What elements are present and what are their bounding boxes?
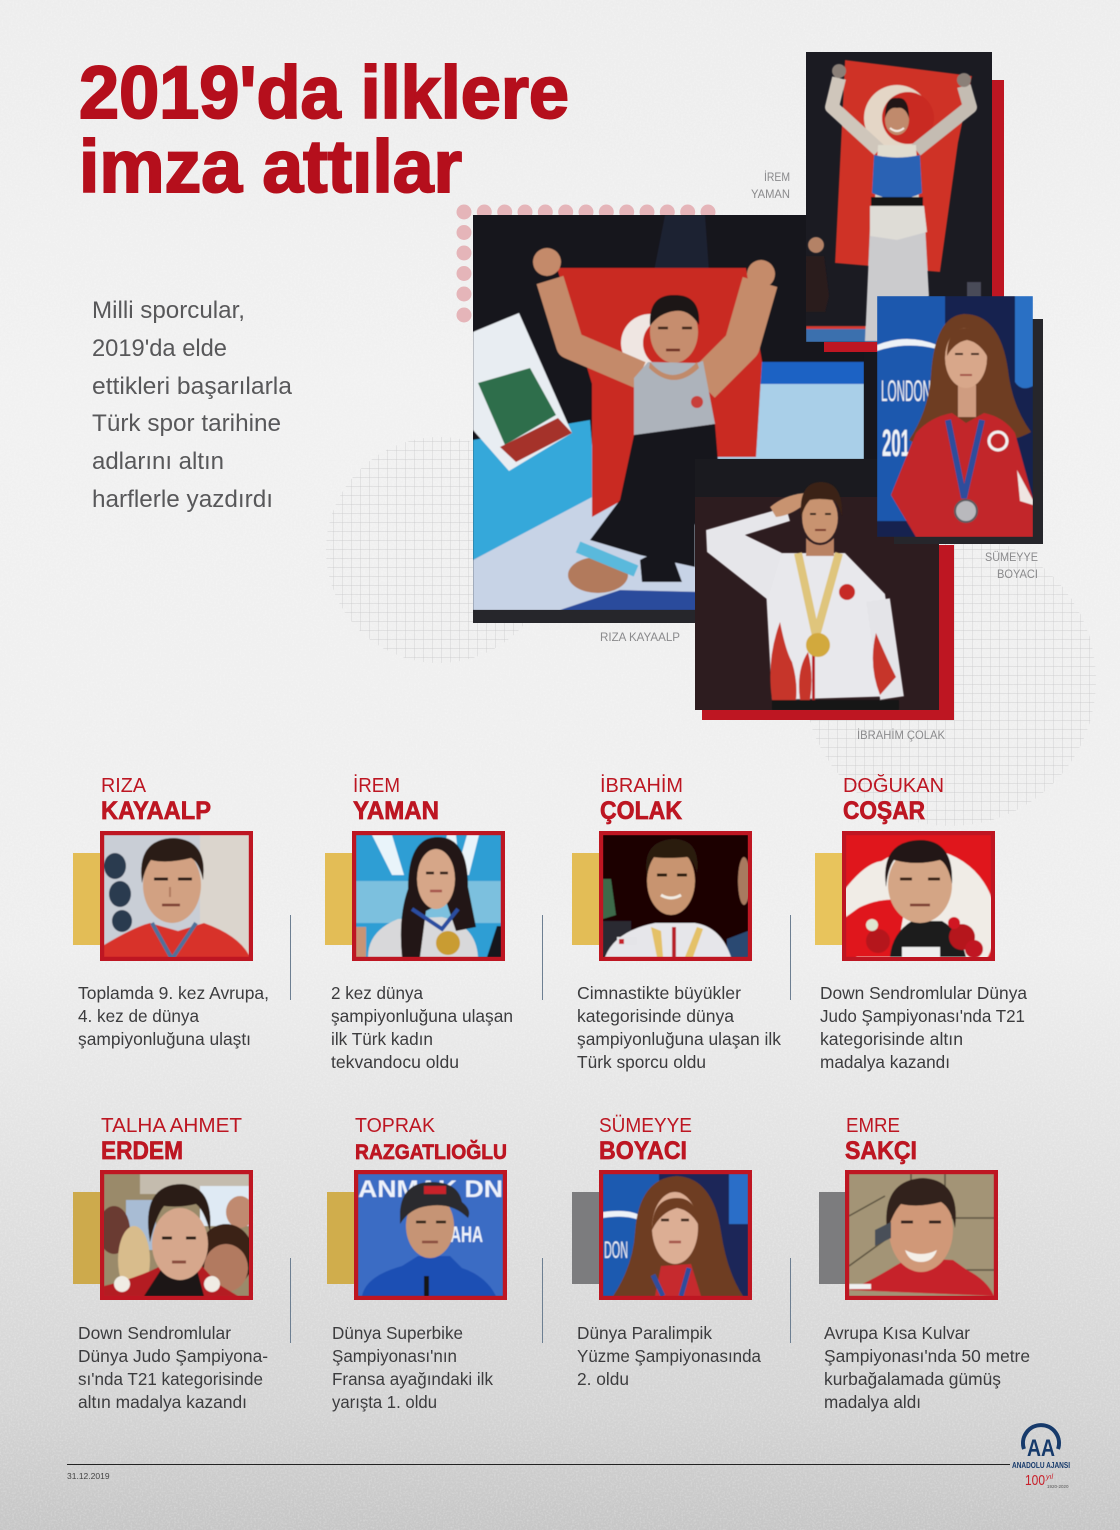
photo captions <box>600 170 1038 742</box>
description: Emre Sakçı <box>824 1323 1030 1412</box>
description: Talha Ahmet Erdem: Dünya Judo Şampiyona- <box>78 1346 268 1366</box>
photo captions: SÜMEYYE <box>985 550 1038 564</box>
description: İrem Yaman: ilk Türk kadın <box>331 1029 433 1049</box>
description: Doğukan Coşar: Down Sendromlular Dünya <box>820 983 1027 1003</box>
intro text: harflerle yazdırdı <box>92 486 273 513</box>
portrait: Talha Ahmet Erdem <box>98 1170 254 1300</box>
description: İrem Yaman: tekvandocu oldu <box>331 1052 459 1072</box>
description: İrem Yaman: 2 kez dünya <box>331 983 423 1003</box>
description: Toprak Razgatlıoğlu: Dünya Superbike <box>332 1323 463 1343</box>
intro text <box>92 297 293 513</box>
card: Talha Ahmet Erdem <box>73 1115 268 1412</box>
card: Sümeyye Boyacı: BOYACI <box>599 1137 687 1165</box>
card: İbrahim Çolak: İBRAHİM <box>600 774 683 797</box>
description: İrem Yaman: şampiyonluğuna ulaşan <box>331 1006 513 1026</box>
photo captions: BOYACI <box>997 567 1038 581</box>
portrait: Rıza Kayaalp <box>100 831 253 961</box>
logo: Anadolu Ajansı <box>1012 1425 1070 1489</box>
dot pattern <box>456 204 716 322</box>
description: Talha Ahmet Erdem <box>78 1323 268 1412</box>
logo: Anadolu Ajansı: 1920-2020 <box>1047 1484 1069 1489</box>
card: İrem Yaman <box>325 774 513 1072</box>
logo: Anadolu Ajansı: 100 <box>1025 1472 1045 1489</box>
card: Sümeyye Boyacı: SÜMEYYE <box>599 1115 692 1137</box>
photo: Rıza Kayaalp <box>473 215 878 623</box>
card: İrem Yaman: İREM <box>353 774 400 797</box>
photo: İrem Yaman <box>802 52 1004 352</box>
card: Rıza Kayaalp <box>73 775 269 1049</box>
portrait: İbrahim Çolak <box>599 831 752 961</box>
intro text: adlarını altın <box>92 448 224 475</box>
photo: Sümeyye Boyacı: LONDON <box>881 375 931 408</box>
photo captions: RIZA KAYAALP <box>600 630 680 644</box>
description: Talha Ahmet Erdem: altın madalya kazandı <box>78 1392 247 1412</box>
card: Talha Ahmet Erdem: TALHA AHMET <box>101 1115 242 1137</box>
description: Doğukan Coşar: Judo Şampiyonası'nda T21 <box>820 1006 1025 1026</box>
description: İbrahim Çolak: kategorisinde dünya <box>577 1006 734 1026</box>
date: 31.12.2019 <box>67 1471 110 1481</box>
description: Doğukan Coşar: madalya kazandı <box>820 1052 950 1072</box>
description: İbrahim Çolak <box>577 983 781 1072</box>
grid circle left <box>326 437 552 663</box>
description: Talha Ahmet Erdem: Down Sendromlular <box>78 1323 231 1343</box>
description: İrem Yaman <box>331 983 513 1072</box>
photo captions: İBRAHİM ÇOLAK <box>857 728 945 742</box>
card: Talha Ahmet Erdem: ERDEM <box>101 1137 183 1165</box>
intro text: Milli sporcular, <box>92 297 245 324</box>
logo: Anadolu Ajansı: yıl <box>1045 1474 1053 1481</box>
description: Rıza Kayaalp <box>78 983 269 1049</box>
description: Sümeyye Boyacı <box>577 1323 761 1389</box>
title: 2019'da ilklere <box>79 51 569 134</box>
title: imza attılar <box>79 125 462 208</box>
description: Toprak Razgatlıoğlu: Fransa ayağındaki ilk <box>332 1369 493 1389</box>
card: Rıza Kayaalp: KAYAALP <box>101 797 211 825</box>
description: Rıza Kayaalp: şampiyonluğuna ulaştı <box>78 1029 251 1049</box>
description: Sümeyye Boyacı: Dünya Paralimpik <box>577 1323 712 1343</box>
card: Emre Sakçı: EMRE <box>846 1115 900 1137</box>
description: İbrahim Çolak: Türk sporcu oldu <box>577 1052 706 1072</box>
photo: Sümeyye Boyacı <box>877 296 1043 544</box>
portrait: Doğukan Coşar <box>842 831 995 961</box>
photo: Sümeyye Boyacı: 201 <box>882 423 910 465</box>
description: Doğukan Coşar <box>820 983 1027 1072</box>
description: Toprak Razgatlıoğlu: Şampiyonası'nın <box>332 1346 457 1366</box>
intro text: Türk spor tarihine <box>92 410 281 437</box>
footer rule <box>67 1464 1010 1465</box>
description: Toprak Razgatlıoğlu: yarışta 1. oldu <box>332 1392 437 1412</box>
card: Toprak Razgatlıoğlu: TOPRAK <box>355 1115 436 1137</box>
description: Sümeyye Boyacı: Yüzme Şampiyonasında <box>577 1346 761 1366</box>
portrait: Toprak Razgatlıoğlu <box>354 1170 507 1300</box>
title <box>79 51 569 208</box>
card: İbrahim Çolak: ÇOLAK <box>600 797 682 825</box>
portrait: Toprak Razgatlıoğlu: ANMAK DN <box>358 1176 503 1203</box>
description: İbrahim Çolak: Cimnastikte büyükler <box>577 983 741 1003</box>
description: Sümeyye Boyacı: 2. oldu <box>577 1369 629 1389</box>
card: İbrahim Çolak <box>572 774 781 1072</box>
portrait: Sümeyye Boyacı: DON <box>604 1237 628 1264</box>
card: Rıza Kayaalp: RIZA <box>101 775 147 797</box>
card: Doğukan Coşar <box>815 774 1027 1072</box>
grid circle right <box>804 534 1096 826</box>
logo: Anadolu Ajansı: ANADOLU AJANSI <box>1012 1460 1070 1470</box>
logo: Anadolu Ajansı: AA <box>1027 1435 1055 1462</box>
photo captions: İREM <box>764 170 790 184</box>
dividers <box>290 915 790 1343</box>
description: Talha Ahmet Erdem: sı'nda T21 kategorisinde <box>78 1369 263 1389</box>
photo captions: YAMAN <box>751 187 790 201</box>
description: Rıza Kayaalp: Toplamda 9. kez Avrupa, <box>78 983 269 1003</box>
card: Doğukan Coşar: DOĞUKAN <box>843 774 944 797</box>
description: Toprak Razgatlıoğlu <box>332 1323 493 1412</box>
card: Emre Sakçı: SAKÇI <box>845 1137 917 1165</box>
photo: İbrahim Çolak <box>695 459 954 720</box>
description: Doğukan Coşar: kategorisinde altın <box>820 1029 963 1049</box>
intro text: ettikleri başarılarla <box>92 373 293 400</box>
description: Emre Sakçı: kurbağalamada gümüş <box>824 1369 1001 1389</box>
description: Emre Sakçı: Şampiyonası'nda 50 metre <box>824 1346 1030 1366</box>
card: Toprak Razgatlıoğlu: RAZGATLIOĞLU <box>355 1140 507 1164</box>
card: Sümeyye Boyacı <box>572 1115 761 1389</box>
description: Emre Sakçı: Avrupa Kısa Kulvar <box>824 1323 970 1343</box>
portrait: Toprak Razgatlıoğlu: AHA <box>450 1222 483 1247</box>
portrait: Emre Sakçı <box>845 1170 998 1300</box>
portrait: İrem Yaman <box>352 831 505 961</box>
card: İrem Yaman: YAMAN <box>353 797 439 825</box>
description: İbrahim Çolak: şampiyonluğuna ulaşan ilk <box>577 1029 781 1049</box>
description: Rıza Kayaalp: 4. kez de dünya <box>78 1006 199 1026</box>
card: Toprak Razgatlıoğlu <box>327 1115 507 1412</box>
card: Emre Sakçı <box>819 1115 1030 1412</box>
description: Emre Sakçı: madalya aldı <box>824 1392 921 1412</box>
portrait: Sümeyye Boyacı <box>599 1170 752 1300</box>
intro text: 2019'da elde <box>92 335 227 362</box>
card: Doğukan Coşar: COŞAR <box>843 797 925 825</box>
